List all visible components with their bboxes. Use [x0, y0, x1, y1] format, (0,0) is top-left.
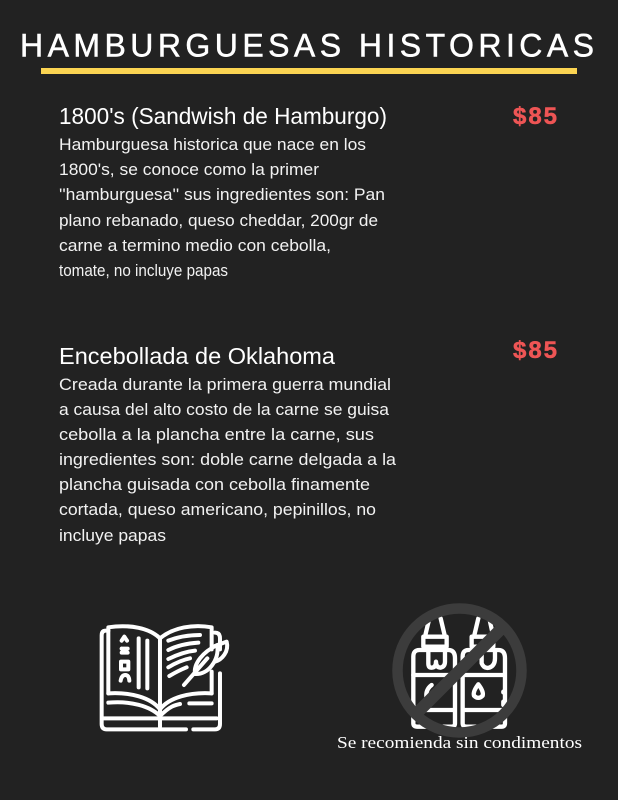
price: second burger: $85 [513, 337, 557, 364]
description: first burger: 1800's, se conoce como la primer [59, 161, 320, 179]
description: second burger: cortada, queso americano, pepinillos, no [59, 501, 376, 519]
description: second burger: a causa del alto costo de la carne se guisa [59, 401, 390, 419]
title: HAMBURGUESAS HISTORICAS [20, 28, 594, 64]
description: first burger: carne a termino medio con cebolla, [59, 237, 331, 255]
description: first burger [59, 136, 385, 280]
title underline [41, 68, 577, 74]
description: second burger: incluye papas [59, 527, 166, 545]
description: first burger: tomate, no incluye papas [59, 262, 228, 280]
description: second burger [59, 376, 397, 545]
heading: first burger: 1800's (Sandwish de Hamburgo) [59, 103, 387, 129]
icon: open book with quill [102, 626, 227, 729]
heading: second burger: Encebollada de Oklahoma [59, 343, 335, 369]
description: second burger: plancha guisada con cebolla finamente [59, 476, 370, 494]
price: first burger: $85 [513, 103, 557, 130]
description: second burger: cebolla a la plancha entre la carne, sus [59, 426, 374, 444]
icon: prohibition sign [398, 608, 522, 732]
description: first burger: plano rebanado, queso cheddar, 200gr de [59, 212, 378, 230]
icon: two sauce bottles [413, 618, 505, 727]
description: first burger: Hamburguesa historica que nace en los [59, 136, 366, 154]
caption: no condiments: Se recomienda sin condimentos [337, 733, 582, 752]
description: second burger: Creada durante la primera guerra mundial [59, 376, 391, 394]
description: second burger: ingredientes son: doble carne delgada a la [59, 451, 397, 469]
panel: first burger [59, 103, 557, 280]
panel: second burger [59, 337, 557, 545]
description: first burger: ''hamburguesa'' sus ingredientes son: Pan [59, 186, 385, 204]
